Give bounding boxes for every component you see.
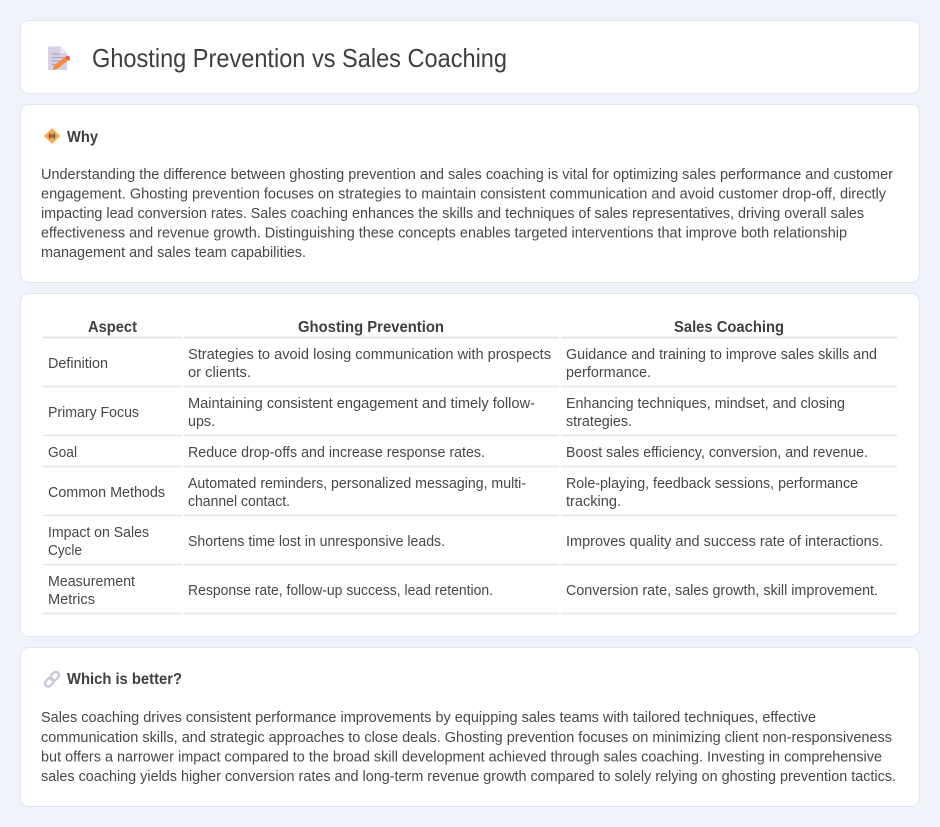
text block: which is better paragraph: but offers a narrower impact compared to the broad skill development achieved through sales coaching. Investing in comprehensive: [41, 750, 882, 766]
panel: header: [20, 20, 920, 94]
table header row: Ghosting Prevention: [298, 319, 444, 336]
text block: which is better paragraph: communication skills, and strategic approaches to close deals. Ghosting prevention focuses on minimizing client non-responsiveness: [41, 730, 892, 746]
row: primary focus: strategies.: [566, 414, 632, 430]
row: common methods: channel contact.: [188, 494, 290, 510]
row: common methods: [43, 476, 897, 516]
text block: why paragraph: Understanding the difference between ghosting prevention and sales coaching is vital for optimizing sales performance and customer: [41, 167, 893, 183]
row: common methods: Automated reminders, personalized messaging, multi-: [188, 476, 526, 492]
row: common methods: tracking.: [566, 494, 621, 510]
text block: why paragraph: [41, 167, 893, 261]
row: primary focus: Primary Focus: [48, 405, 139, 421]
row: goal: [43, 445, 897, 466]
row: impact on sales cycle: Shortens time lost in unresponsive leads.: [188, 534, 445, 550]
row: impact on sales cycle: Improves quality and success rate of interactions.: [566, 534, 883, 550]
table header row: [43, 319, 897, 338]
heading: why: Why: [67, 129, 98, 146]
panel: why: [20, 104, 920, 282]
row: primary focus: ups.: [188, 414, 215, 430]
row: goal: Boost sales efficiency, conversion, and revenue.: [566, 445, 868, 461]
text block: which is better paragraph: Sales coaching drives consistent performance improvements by equipping sales teams with tailored techniques, effective: [41, 710, 816, 726]
row: impact on sales cycle: Impact on Sales: [48, 525, 149, 541]
row: measurement metrics: Conversion rate, sales growth, skill improvement.: [566, 583, 878, 599]
title: Ghosting Prevention vs Sales Coaching: [92, 45, 507, 73]
row: definition: [43, 347, 897, 386]
table header row: Aspect: [88, 319, 138, 336]
text block: why paragraph: impacting lead conversion rates. Sales coaching enhances the skills and techniques of sales representatives, driving overall sales: [41, 206, 864, 222]
row: definition: or clients.: [188, 365, 251, 381]
text block: which is better paragraph: sales coaching yields higher conversion rates and long-term revenue growth compared to solely relying on ghosting prevention tactics.: [41, 769, 896, 785]
panel: which is better: [20, 648, 920, 806]
heading: which is better: Which is better?: [67, 671, 182, 688]
row: primary focus: Enhancing techniques, mindset, and closing: [566, 396, 845, 412]
text block: which is better paragraph: [41, 710, 896, 785]
icon: link: [44, 671, 60, 688]
icon: memo with pencil: [48, 46, 70, 70]
table header row: Sales Coaching: [674, 319, 784, 336]
row: goal: Reduce drop-offs and increase response rates.: [188, 445, 485, 461]
row: common methods: Role-playing, feedback sessions, performance: [566, 476, 858, 492]
row: measurement metrics: Response rate, follow-up success, lead retention.: [188, 583, 493, 599]
row: impact on sales cycle: [43, 525, 897, 564]
row: definition: Definition: [48, 356, 108, 372]
row: definition: Strategies to avoid losing communication with prospects: [188, 347, 551, 363]
row: primary focus: [43, 396, 897, 436]
panel: comparison table: [20, 294, 920, 636]
text block: why paragraph: engagement. Ghosting prevention focuses on strategies to maintain consistent communication and avoid customer drop-off, directly: [41, 186, 887, 202]
row: common methods: Common Methods: [48, 485, 165, 501]
row: definition: Guidance and training to improve sales skills and: [566, 347, 877, 363]
row: impact on sales cycle: Cycle: [48, 543, 82, 559]
text block: why paragraph: management and sales team capabilities.: [41, 245, 306, 261]
icon: construction diamond: [44, 128, 60, 144]
row: measurement metrics: Measurement: [48, 574, 135, 590]
text block: why paragraph: effectiveness and revenue growth. Distinguishing these concepts enables targeted interventions that improve both relationship: [41, 226, 847, 242]
row: measurement metrics: [43, 574, 897, 614]
row: primary focus: Maintaining consistent engagement and timely follow-: [188, 396, 535, 412]
row: definition: performance.: [566, 365, 651, 381]
row: goal: Goal: [48, 445, 77, 461]
row: measurement metrics: Metrics: [48, 592, 95, 608]
